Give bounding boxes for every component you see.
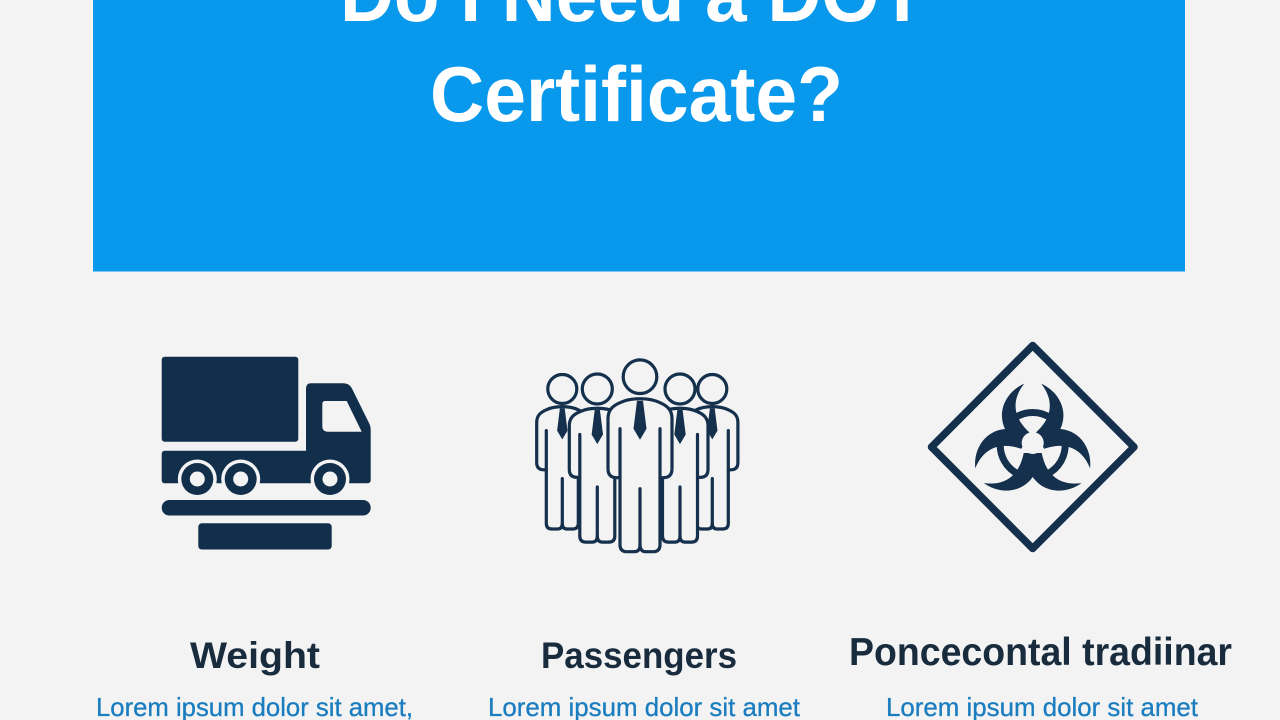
- heading: third requirement: Poncecontal tradiinar: [849, 631, 1232, 674]
- icon: group of passengers: [537, 360, 738, 552]
- title: Certificate?: [430, 50, 843, 138]
- heading: Passengers: Passengers: [541, 635, 737, 676]
- panel: hazardous materials column: [849, 346, 1232, 720]
- icon: truck: [162, 357, 371, 550]
- panel: weight column: [96, 357, 413, 720]
- icon: biohazard diamond: [932, 346, 1134, 548]
- panel: passengers column: [488, 360, 801, 720]
- panel: header banner: [93, 0, 1185, 272]
- title: [340, 0, 925, 138]
- heading: Weight: Weight: [190, 635, 320, 676]
